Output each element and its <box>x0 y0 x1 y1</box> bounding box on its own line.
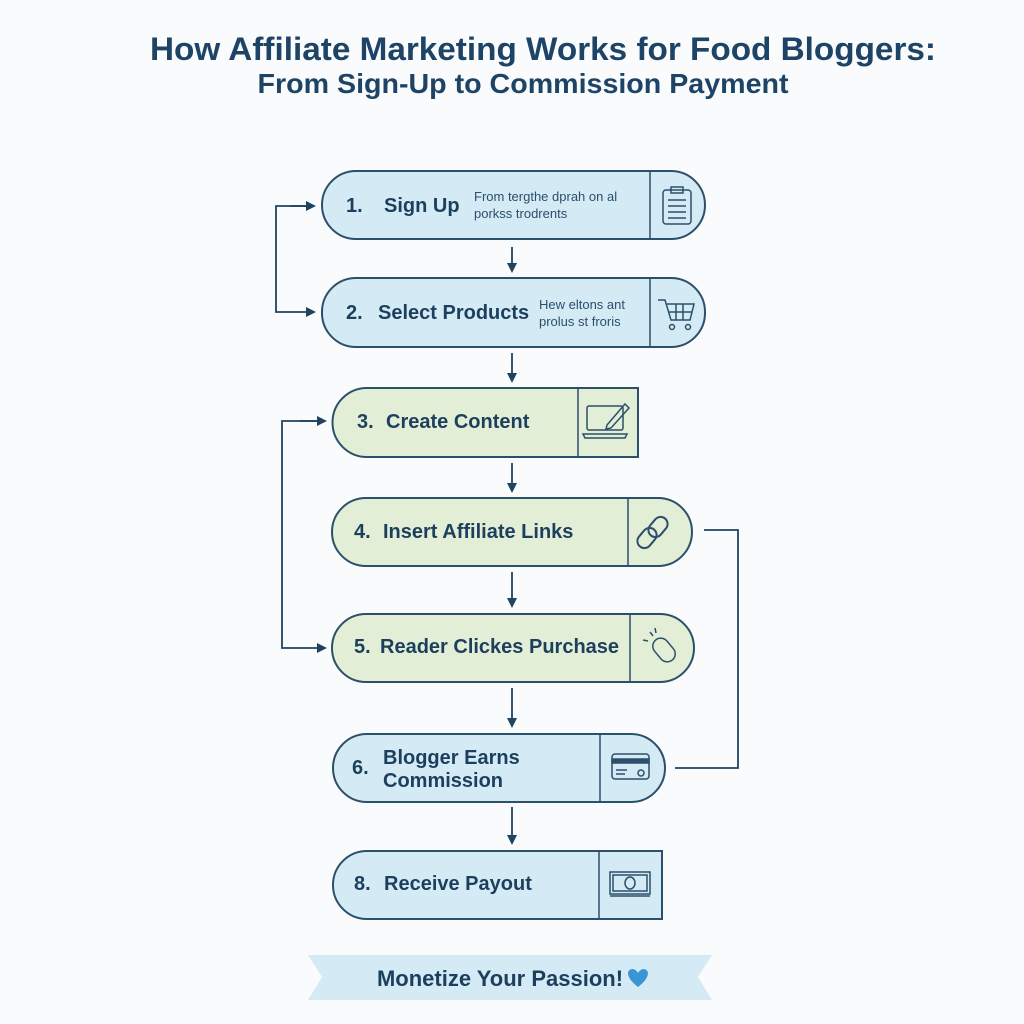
step 1: sign up: 1. <box>346 195 363 217</box>
step 3: create content: Create Content <box>386 411 530 433</box>
icon: credit card <box>612 754 649 779</box>
step 3: create content: 3. <box>357 411 374 433</box>
step 1: sign up: From tergthe dprah on al <box>474 189 617 204</box>
step 1: sign up: porkss trodrents <box>474 206 568 221</box>
step 1: sign up: Sign Up <box>384 195 460 217</box>
step 2: select products: prolus st froris <box>539 314 621 329</box>
step 3: create content <box>332 388 638 457</box>
step 6: blogger earns commission <box>333 734 665 802</box>
step 6: blogger earns commission: 6. <box>352 757 369 779</box>
step 8: receive payout: Receive Payout <box>384 873 532 895</box>
icon: cart <box>658 300 694 330</box>
step 2: select products: Hew eltons ant <box>539 297 625 312</box>
icon: chain link <box>635 514 670 551</box>
arrow: loop create content to reader clicks <box>282 421 325 648</box>
arrow: loop sign up to select products <box>276 206 314 312</box>
icon: mouse click <box>643 628 678 665</box>
step 1: sign up <box>322 171 705 239</box>
step 5: reader clicks purchase: 5. <box>354 636 371 658</box>
title: How Affiliate Marketing Works for Food Bloggers: <box>150 31 936 67</box>
icon: clipboard <box>663 187 691 224</box>
step 5: reader clicks purchase <box>332 614 694 682</box>
icon: laptop <box>583 404 629 438</box>
icon: heart <box>628 969 648 987</box>
title: From Sign-Up to Commission Payment <box>258 68 788 99</box>
step 2: select products: Select Products <box>378 302 529 324</box>
arrow: right loop from links to commission <box>675 530 738 768</box>
icon: banknote <box>610 872 650 896</box>
banner: monetize your passion <box>308 955 712 1000</box>
step 4: insert affiliate links <box>332 498 692 566</box>
banner: monetize your passion: Monetize Your Passion! <box>377 966 623 991</box>
step 6: blogger earns commission: Blogger Earns <box>383 747 520 769</box>
step 5: reader clicks purchase: Reader Clickes Purchase <box>380 636 619 658</box>
step 4: insert affiliate links: Insert Affiliate Links <box>383 521 573 543</box>
step 8: receive payout <box>333 851 662 919</box>
step 4: insert affiliate links: 4. <box>354 521 371 543</box>
step 6: blogger earns commission: Commission <box>383 770 503 792</box>
title <box>150 31 936 99</box>
step 8: receive payout: 8. <box>354 873 371 895</box>
step 2: select products <box>322 278 705 347</box>
step 2: select products: 2. <box>346 302 363 324</box>
arrows: down connectors <box>511 247 513 843</box>
